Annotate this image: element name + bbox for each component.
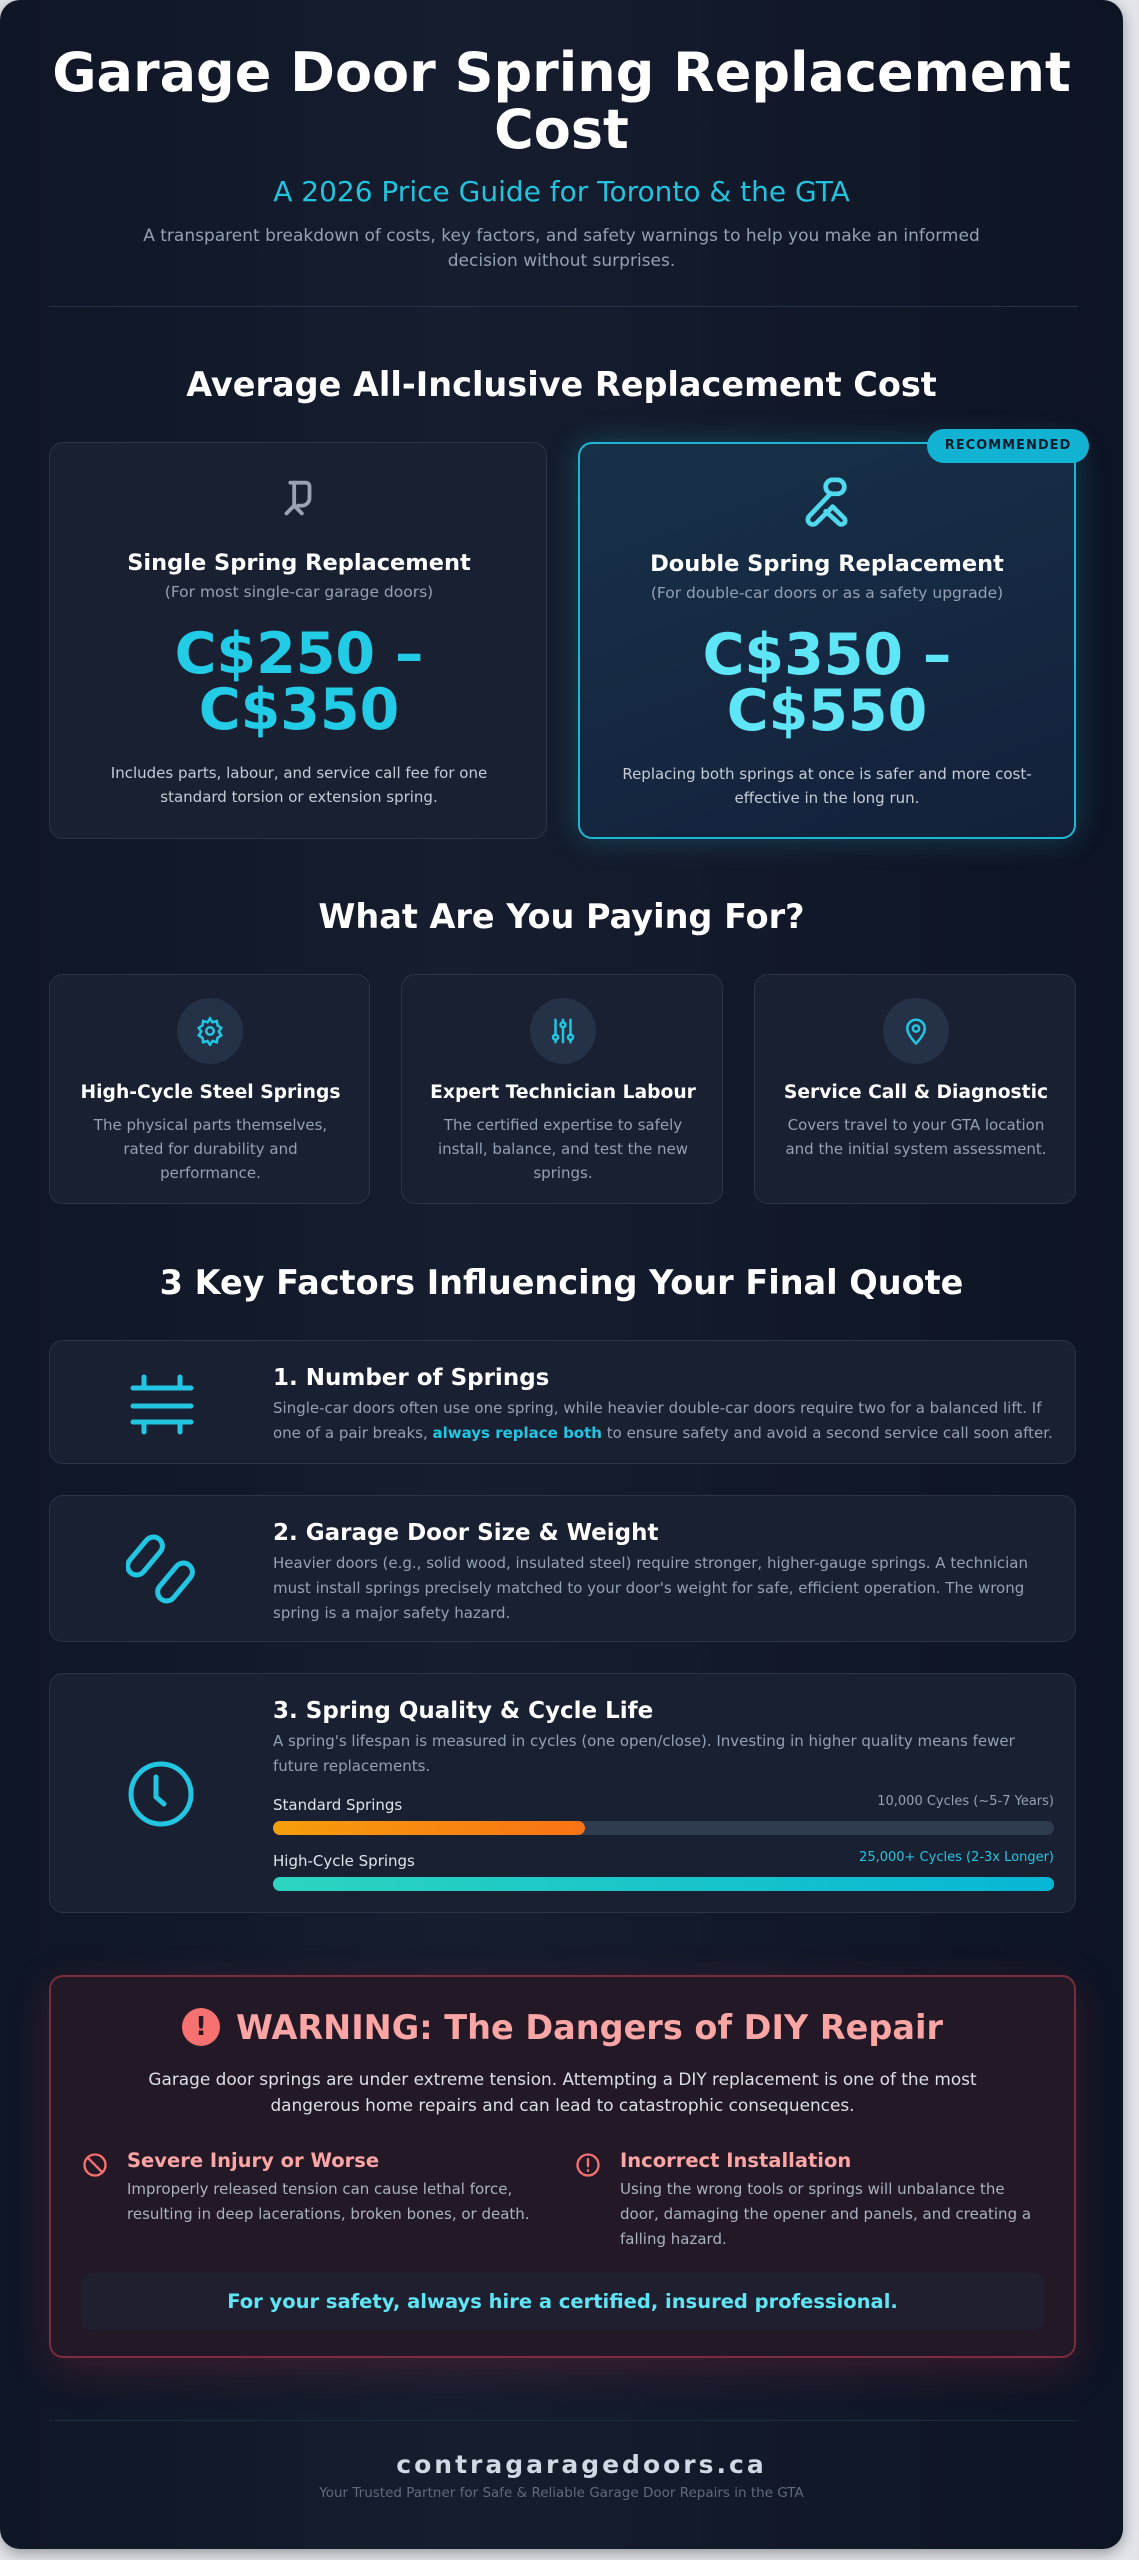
bar chart: cycle life: 25,000+ Cycles (2-3x Longer): [859, 1850, 1054, 1865]
card: labour: Expert Technician Labour: [430, 1082, 696, 1103]
warning item: installation: Using the wrong tools or springs will unbalance the door, damaging the opener and panels, and creating a falling hazard.: [620, 2180, 1031, 2248]
card: double spring: Double Spring Replacement: [650, 551, 1004, 577]
card: service call: [754, 974, 1076, 1204]
card: double spring: C$550: [727, 678, 927, 744]
warning item: injury: [83, 2149, 530, 2223]
warning item: injury: Improperly released tension can cause lethal force, resulting in deep lacerations, broken bones, or death.: [127, 2180, 530, 2223]
card: single spring: Includes parts, labour, and service call fee for one standard torsion or extension spring.: [111, 764, 487, 806]
heading: paying for: What Are You Paying For?: [318, 897, 805, 936]
intro text: A transparent breakdown of costs, key factors, and safety warnings to help you make an informed decision without surprises.: [143, 226, 980, 271]
bar chart: cycle life: [273, 1794, 1054, 1891]
icon: springs count: [130, 1374, 194, 1434]
card: springs: The physical parts themselves, rated for durability and performance.: [94, 1116, 327, 1182]
card: labour: [401, 974, 723, 1204]
card: springs: [49, 974, 370, 1204]
card: single spring: (For most single-car garage doors): [165, 583, 433, 601]
bar chart: cycle life: Standard Springs: [273, 1796, 402, 1814]
card: double spring: C$350 –: [703, 622, 951, 688]
icon: sliders: [530, 998, 596, 1064]
factor 1: Single-car doors often use one spring, while heavier double-car doors require two for a balanced lift. If one of a pair breaks, always replace both to ensure safety and avoid a second service call soon after.: [273, 1399, 1053, 1442]
price: C$250 –: [175, 621, 423, 687]
title: [52, 41, 1071, 161]
icon: link: [126, 1534, 195, 1604]
warning heading: WARNING: The Dangers of DIY Repair: [236, 2008, 943, 2047]
card: service call: Service Call & Diagnostic: [784, 1082, 1048, 1103]
badge: recommended: RECOMMENDED: [945, 438, 1071, 453]
card title: Single Spring Replacement: [127, 550, 471, 576]
price: C$350: [199, 677, 399, 743]
bar chart: cycle life: High-Cycle Springs: [273, 1852, 415, 1870]
factor 2: Heavier doors (e.g., solid wood, insulated steel) require stronger, higher-gauge springs. A technician must install springs precisely matched to your door's weight for safe, efficient operation. The wrong spring is a major safety hazard.: [273, 1554, 1028, 1622]
card: service call: Covers travel to your GTA location and the initial system assessment.: [785, 1116, 1047, 1158]
factor 3: 3. Spring Quality & Cycle Life: [273, 1698, 653, 1724]
warning item: installation: [576, 2149, 1031, 2248]
heading: key factors: 3 Key Factors Influencing Your Final Quote: [160, 1263, 963, 1302]
card: single spring: [49, 442, 547, 839]
factor 3: [49, 1673, 1076, 1913]
callout: hire professional: For your safety, always hire a certified, insured professional.: [227, 2290, 898, 2313]
icon: clock: [128, 1762, 194, 1826]
warning heading: !: [195, 2012, 207, 2042]
title: Garage Door Spring Replacement: [52, 41, 1071, 104]
price: [175, 621, 423, 743]
factor 2: [49, 1495, 1076, 1642]
card: double spring: Replacing both springs at once is safer and more cost-effective in the long run.: [622, 765, 1032, 807]
callout: hire professional: [81, 2273, 1044, 2330]
footer tagline: Your Trusted Partner for Safe & Reliable Garage Door Repairs in the GTA: [319, 2485, 804, 2501]
factor 1: [49, 1340, 1076, 1464]
icon: double spring: [806, 478, 848, 527]
factor 1: 1. Number of Springs: [273, 1365, 549, 1391]
title: Cost: [494, 98, 629, 161]
factor 3: A spring's lifespan is measured in cycles (one open/close). Investing in higher quality means fewer future replacements.: [273, 1732, 1015, 1775]
card: double spring: [578, 442, 1076, 839]
heading: average cost: Average All-Inclusive Replacement Cost: [186, 365, 937, 404]
subtitle: A 2026 Price Guide for Toronto & the GTA: [273, 175, 850, 208]
footer domain: contragaragedoors.ca: [396, 2450, 767, 2479]
panel: warning: [49, 1975, 1076, 2358]
card: labour: The certified expertise to safely install, balance, and test the new springs.: [438, 1116, 688, 1182]
warning item: injury: Severe Injury or Worse: [127, 2149, 379, 2172]
badge: recommended: [927, 429, 1089, 463]
factor 2: 2. Garage Door Size & Weight: [273, 1520, 658, 1546]
panel: warning: Garage door springs are under extreme tension. Attempting a DIY replacement is one of the most dangerous home repairs and can lead to catastrophic consequences.: [148, 2069, 977, 2115]
icon: gear: [177, 998, 243, 1064]
bar chart: cycle life: 10,000 Cycles (~5-7 Years): [877, 1794, 1054, 1809]
icon: single spring: [284, 480, 312, 516]
warning item: installation: Incorrect Installation: [620, 2149, 851, 2172]
card: double spring: (For double-car doors or as a safety upgrade): [651, 584, 1003, 602]
card: springs: High-Cycle Steel Springs: [81, 1082, 340, 1103]
icon: location pin: [883, 998, 949, 1064]
